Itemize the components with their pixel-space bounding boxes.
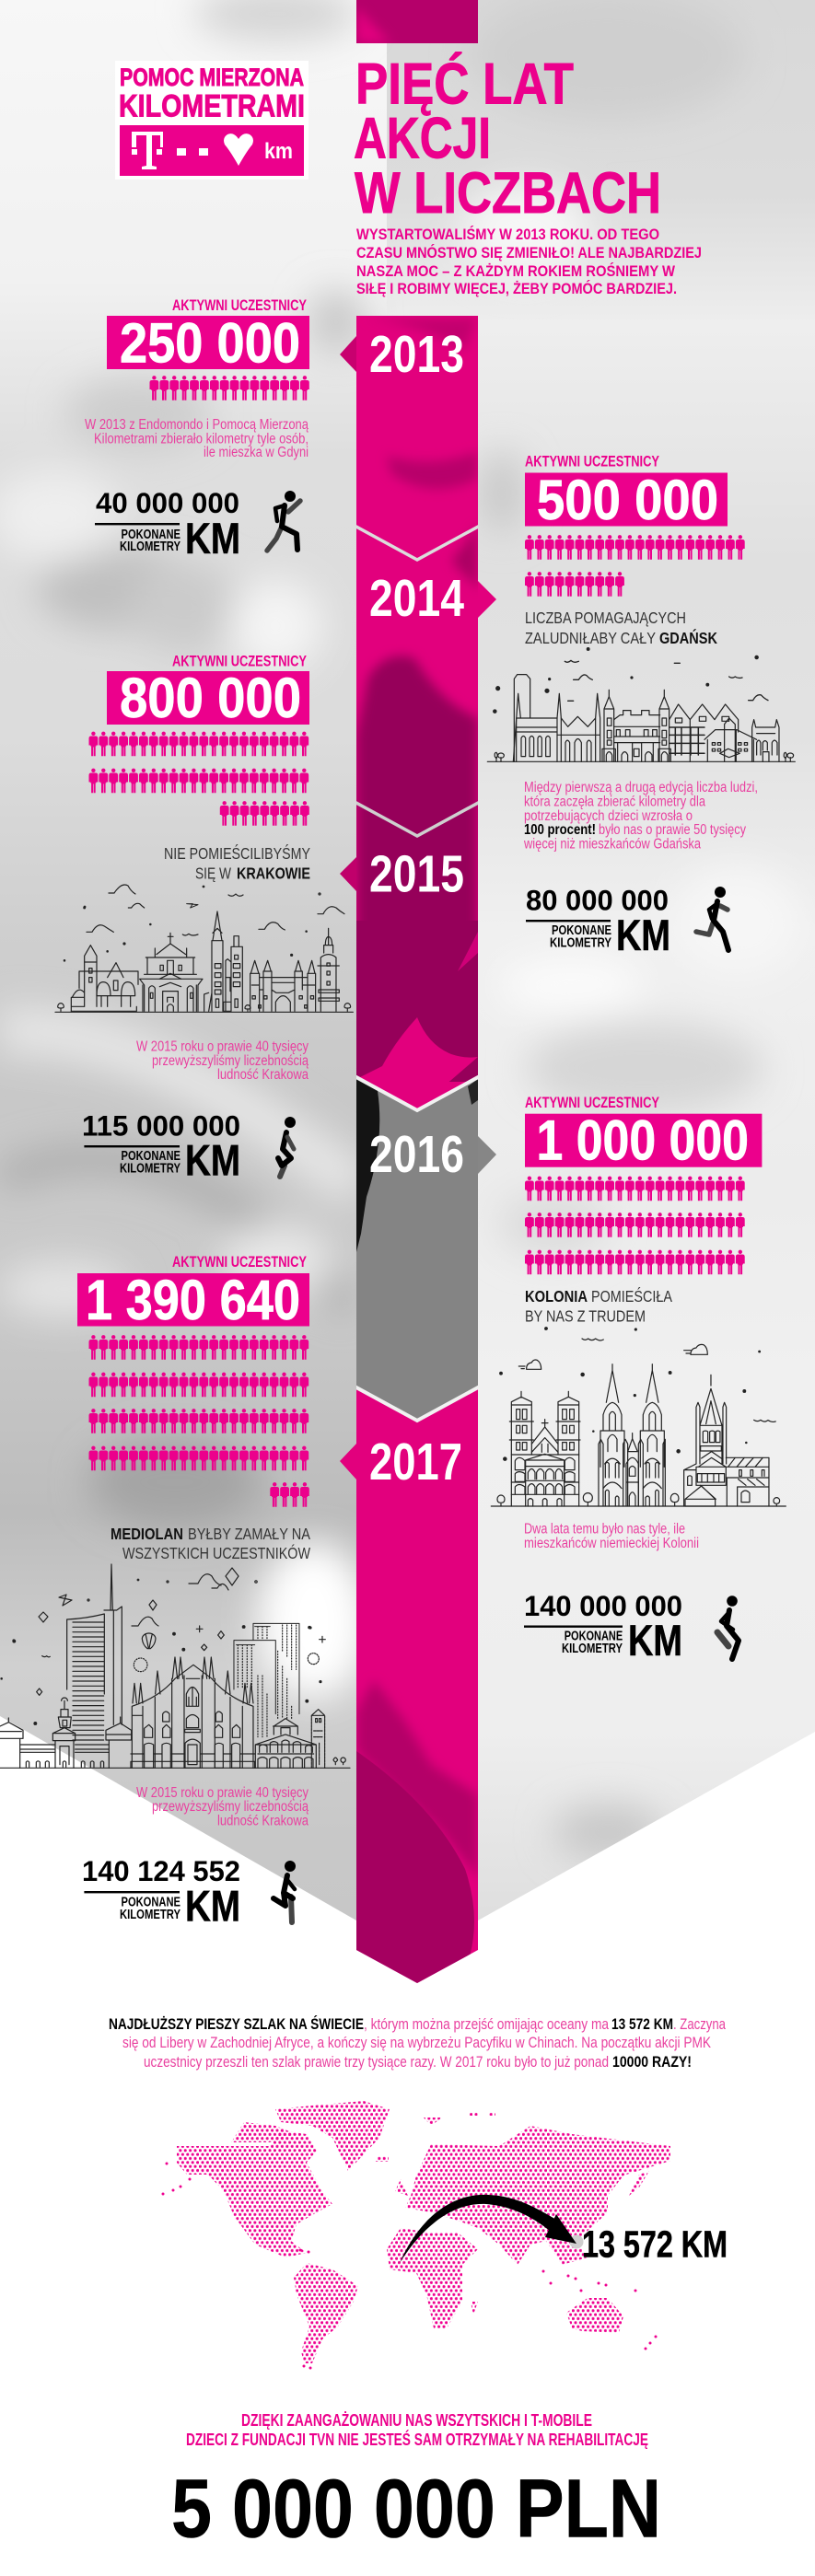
- blurred grey photo background: [0, 0, 815, 1920]
- text block: longest trail: NAJDŁUŻSZY PIESZY SZLAK NA ŚWIECIE: [109, 2015, 364, 2033]
- people rows: [88, 1335, 309, 1507]
- year marker 2013: 2013: [369, 325, 464, 384]
- description: [523, 780, 758, 853]
- distance stat: KILOMETRY: [120, 540, 180, 554]
- stat: 800 000: 800 000: [120, 667, 301, 729]
- 2017 lower dark: [356, 1680, 478, 1878]
- icon: T-Mobile T, dots, heart: km: [264, 139, 293, 164]
- distance stat: KM: [185, 514, 240, 563]
- panel: 2013: [85, 296, 309, 563]
- distance stat: KM: [628, 1616, 682, 1665]
- description: ludność Krakowa: [217, 1814, 309, 1828]
- text block: longest trail: . Zaczyna: [673, 2016, 727, 2033]
- caption: [525, 1286, 672, 1326]
- caption: ZALUDNIŁABY CAŁY: [525, 629, 656, 647]
- panel: 2015: [55, 653, 353, 1185]
- stat: 1 000 000: 1 000 000: [536, 1108, 749, 1171]
- distance stat: 40 000 000: [96, 486, 239, 519]
- title: W LICZBACH: [355, 161, 661, 226]
- caption: LICZBA POMAGAJĄCYCH: [525, 609, 686, 627]
- description: [136, 1785, 309, 1828]
- distance stat: [82, 1108, 240, 1185]
- panel: 2017: [0, 1253, 350, 1930]
- description: W 2015 roku o prawie 40 tysięcy: [136, 1785, 309, 1801]
- dotted world map: [162, 2101, 728, 2370]
- distance stat: KM: [185, 1882, 240, 1930]
- distance stat: POKONANE: [122, 1149, 180, 1164]
- caption: MEDIOLAN: [111, 1525, 183, 1543]
- description: Dwa lata temu było nas tyle, ile: [524, 1522, 685, 1537]
- intro text: CZASU MNÓSTWO SIĘ ZMIENIŁO! ALE NAJBARDZIEJ: [356, 244, 702, 261]
- description: Kilometrami zbierało kilometry tyle osób,: [94, 431, 309, 447]
- description: potrzebujących dzieci wzrosła o: [524, 808, 693, 824]
- spine: top tab: [356, 0, 478, 43]
- panel: 2016: [491, 1094, 786, 1665]
- distance stat: [524, 1589, 682, 1665]
- distance stat: KM: [616, 911, 670, 959]
- intro text: SIŁĘ I ROBIMY WIĘCEJ, ŻEBY POMÓC BARDZIEJ.: [356, 280, 677, 297]
- year marker 2014: 2014: [369, 569, 464, 628]
- description: [524, 1522, 699, 1551]
- caption: KOLONIA: [525, 1287, 588, 1305]
- title: PIĘĆ LAT: [355, 52, 574, 116]
- distance stat: POKONANE: [565, 1630, 623, 1644]
- text block: thanks: [186, 2411, 648, 2449]
- distance stat: 80 000 000: [526, 884, 669, 917]
- intro text: WYSTARTOWALIŚMY W 2013 ROKU. OD TEGO: [356, 226, 659, 243]
- map label: 13 572 KM: [582, 2222, 728, 2265]
- heading: AKTYWNI UCZESTNICY: [172, 1253, 307, 1271]
- description: mieszkańców niemieckiej Kolonii: [524, 1536, 699, 1551]
- heading: AKTYWNI UCZESTNICY: [525, 453, 659, 470]
- caption: POMIEŚCIŁA: [591, 1286, 672, 1305]
- icon: T-Mobile T, dots, heart: [132, 132, 293, 169]
- caption: WSZYSTKICH UCZESTNIKÓW: [122, 1543, 310, 1562]
- year marker 2015: 2015: [369, 845, 464, 904]
- skyline: Mediolan: [0, 1564, 350, 1768]
- people rows: [525, 1177, 745, 1274]
- description: więcej niż mieszkańców Gdańska: [523, 836, 701, 853]
- heading: AKTYWNI UCZESTNICY: [172, 653, 307, 670]
- caption: BYŁBY ZAMAŁY NA: [188, 1525, 310, 1543]
- distance stat: POKONANE: [122, 1895, 180, 1909]
- description: przewyższyliśmy liczebnością: [152, 1053, 309, 1069]
- distance stat: KILOMETRY: [550, 936, 611, 951]
- 2016 grey section: [356, 1077, 478, 1420]
- sky details above Kraków: [84, 885, 320, 908]
- distance stat: 115 000 000: [82, 1108, 240, 1142]
- distance stat: POKONANE: [552, 923, 611, 938]
- year marker 2016: 2016: [369, 1125, 464, 1184]
- panel: 2014: [487, 453, 795, 959]
- logo: Pomoc Mierzona Kilometrami: [115, 61, 309, 180]
- text block: longest trail: , którym można przejść omijając oceany ma: [364, 2016, 610, 2033]
- text block: thanks: DZIECI Z FUNDACJI TVN NIE JESTEŚ SAM OTRZYMAŁY NA REHABILITACJĘ: [186, 2430, 648, 2449]
- distance stat: KILOMETRY: [120, 1908, 180, 1922]
- distance stat: KM: [185, 1136, 240, 1185]
- text block: longest trail: uczestnicy przeszli ten szlak prawie trzy tysiące razy. W 2017 roku było to już ponad: [144, 2054, 609, 2071]
- description: ludność Krakowa: [217, 1067, 309, 1083]
- total amount: 5 000 000 PLN: [171, 2464, 661, 2556]
- skyline: Kolonia: [491, 1328, 786, 1506]
- people rows: [88, 732, 309, 826]
- caption: BY NAS Z TRUDEM: [525, 1307, 646, 1326]
- logo: Pomoc Mierzona Kilometrami: POMOC MIERZONA: [120, 64, 304, 91]
- heading: AKTYWNI UCZESTNICY: [525, 1094, 659, 1111]
- sky details above Mediolan: [13, 1568, 311, 1642]
- description: Między pierwszą a drugą edycją liczba ludzi,: [524, 780, 758, 795]
- description: W 2015 roku o prawie 40 tysięcy: [136, 1039, 309, 1055]
- caption: GDAŃSK: [659, 628, 717, 647]
- year marker 2013: [340, 325, 464, 384]
- intro text: [356, 226, 702, 297]
- skyline: Kraków: [55, 903, 353, 1012]
- description: ile mieszka w Gdyni: [204, 445, 309, 460]
- icon: runner: [267, 491, 300, 551]
- year marker 2017: [340, 1433, 462, 1491]
- icon: runner: [696, 887, 728, 950]
- caption: [525, 609, 717, 647]
- heading: AKTYWNI UCZESTNICY: [172, 296, 307, 314]
- intro text: NASZA MOC – Z KAŻDYM ROKIEM ROŚNIEMY W: [356, 262, 675, 280]
- distance stat: 140 000 000: [524, 1589, 682, 1622]
- distance stat: KILOMETRY: [120, 1162, 180, 1177]
- caption: NIE POMIEŚCILIBYŚMY: [164, 843, 310, 863]
- title: [354, 52, 661, 226]
- title: AKCJI: [354, 106, 491, 170]
- people row: [149, 376, 309, 400]
- text block: longest trail: 13 572 KM: [611, 2016, 673, 2033]
- distance stat: [526, 884, 670, 959]
- chevrons: [355, 526, 480, 560]
- distance stat: KILOMETRY: [562, 1642, 623, 1656]
- description: [85, 417, 309, 460]
- description: W 2013 z Endomondo i Pomocą Mierzoną: [85, 417, 309, 433]
- text block: longest trail: 10000 RAZY!: [612, 2054, 692, 2071]
- distance stat: [82, 1854, 240, 1930]
- arrow: Liberia to China: [400, 2195, 584, 2263]
- icon: runner: [278, 1117, 296, 1177]
- icon: runner: [717, 1595, 739, 1659]
- stat: 1 390 640: 1 390 640: [86, 1269, 300, 1331]
- logo: Pomoc Mierzona Kilometrami: KILOMETRAMI: [119, 88, 305, 123]
- year marker 2015: [340, 845, 464, 904]
- caption: KRAKOWIE: [237, 864, 310, 882]
- distance stat: POKONANE: [122, 528, 180, 542]
- stat: 250 000: 250 000: [120, 311, 300, 374]
- description: 100 procent!: [524, 822, 596, 838]
- caption: [164, 843, 310, 882]
- skyline: Gdańsk: [487, 648, 795, 761]
- people rows: [525, 535, 745, 597]
- stat: 500 000: 500 000: [537, 469, 718, 531]
- text block: longest trail: się od Libery w Zachodniej Afryce, a kończy się na wybrzeżu Pacyfiku w Chinach. Na początku akcji PMK: [122, 2035, 711, 2051]
- distance stat: [95, 486, 240, 563]
- icon: runner: [274, 1861, 296, 1922]
- description: [136, 1039, 309, 1083]
- text block: thanks: DZIĘKI ZAANGAŻOWANIU NAS WSZYTSKICH I T-MOBILE: [241, 2411, 592, 2430]
- distance stat: 140 124 552: [82, 1854, 240, 1887]
- year marker 2017: 2017: [369, 1433, 462, 1491]
- spine: timeline ribbon: [355, 316, 480, 1989]
- description: która zaczęła zbierać kilometry dla: [524, 794, 705, 810]
- caption: [111, 1525, 310, 1562]
- description: przewyższyliśmy liczebnością: [152, 1799, 309, 1815]
- flame on ribbon: [360, 1017, 478, 1082]
- description: było nas o prawie 50 tysięcy: [599, 822, 746, 838]
- text block: longest trail: [109, 2015, 727, 2071]
- caption: SIĘ W: [195, 864, 231, 882]
